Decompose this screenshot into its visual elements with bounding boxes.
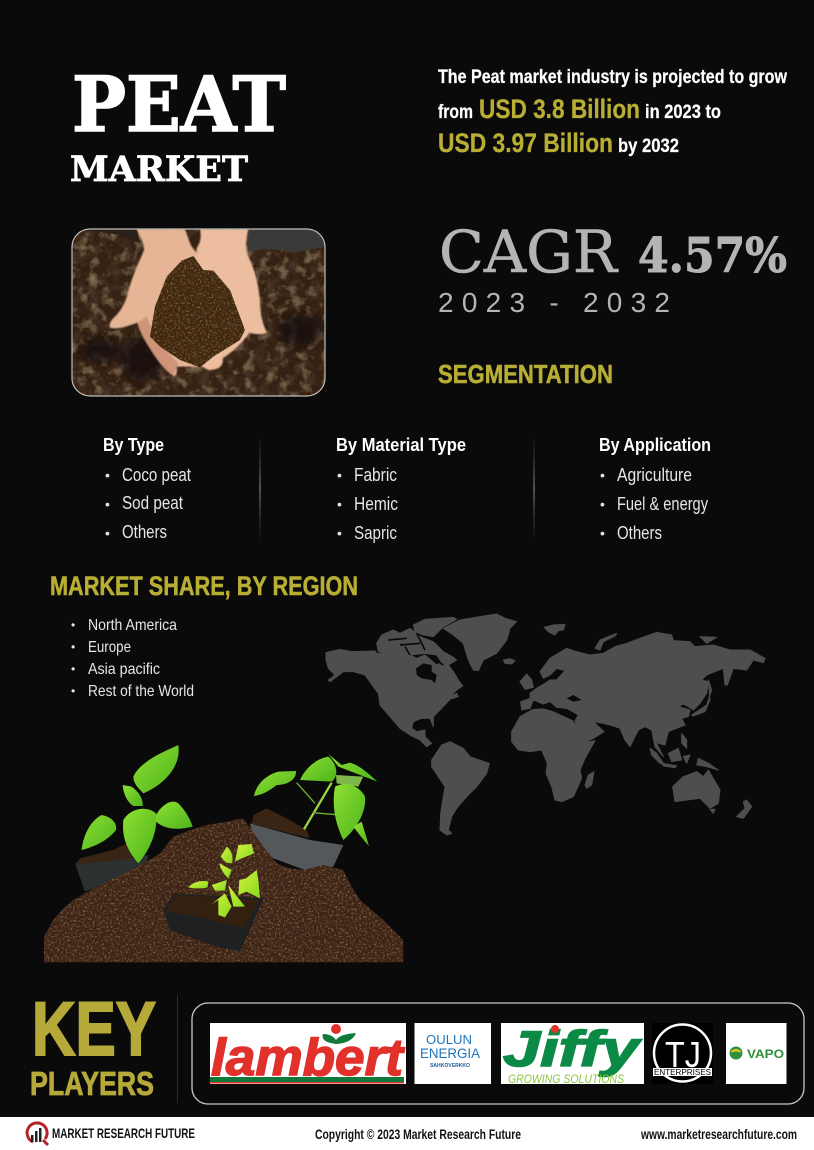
panel: key player logos: [192, 1003, 804, 1104]
middle pot soil: [167, 895, 260, 928]
logo: lambert: lambert: [211, 1029, 406, 1087]
logo: tj enterprises: TJ: [665, 1034, 701, 1075]
heading: key players: KEY: [32, 987, 156, 1072]
segmentation: by application: •: [600, 496, 605, 512]
region list: Rest of the World: [88, 683, 194, 700]
region list: Asia pacific: [88, 661, 160, 678]
segmentation: by material type: Sapric: [354, 523, 397, 543]
middle pot: [163, 893, 263, 952]
segmentation: by material type: [336, 435, 466, 543]
CAGR callout: 2023 - 2032: [438, 287, 670, 318]
logo: jiffy: [501, 1021, 644, 1086]
segmentation: by material type: Fabric: [354, 465, 397, 485]
footer bar: MARKET RESEARCH FUTURE: [52, 1125, 195, 1141]
footer bar: Copyright © 2023 Market Research Future: [315, 1127, 521, 1142]
region list: •: [71, 684, 75, 698]
title: PEAT: [72, 60, 286, 149]
logo: oulun energia: SAHKOVERKKO: [430, 1063, 470, 1069]
segmentation: by type: •: [105, 525, 110, 541]
CAGR callout: [438, 218, 787, 318]
region list: •: [71, 618, 75, 632]
market projection text: from: [438, 102, 473, 123]
peat mound: [43, 817, 404, 963]
left pot: [75, 855, 148, 892]
logo: vapo: [726, 1023, 786, 1084]
region list: •: [71, 662, 75, 676]
market projection text: in 2023 to: [645, 102, 721, 123]
heading: market share by region: MARKET SHARE, BY REGION: [50, 571, 358, 601]
heading: key players: [30, 987, 156, 1102]
logo: jiffy: GROWING SOLUTIONS: [508, 1072, 624, 1086]
left pot soil: [75, 842, 150, 865]
left seedling: [82, 745, 193, 863]
logo: oulun energia: OULUN: [426, 1032, 472, 1047]
logo: jiffy: Jiffy: [503, 1021, 642, 1077]
segmentation: by type: [103, 435, 191, 542]
title: MARKET: [70, 149, 248, 190]
segmentation: by type: Others: [122, 522, 167, 542]
region list: [71, 617, 194, 700]
right pot soil: [252, 808, 310, 838]
market projection text: USD 3.8 Billion: [479, 94, 640, 124]
segmentation: by application: By Application: [599, 435, 711, 455]
heading: segmentation: SEGMENTATION: [438, 359, 613, 389]
segmentation: by type: By Type: [103, 435, 164, 455]
market projection text: USD 3.97 Billion: [438, 128, 613, 158]
region list: •: [71, 640, 75, 654]
logo: vapo: VAPO: [747, 1047, 784, 1061]
region list: Europe: [88, 639, 131, 656]
world map: [326, 614, 765, 835]
segmentation: by material type: Hemic: [354, 494, 398, 514]
photo: seedlings in pots on peat mound: [43, 745, 404, 963]
CAGR callout: 4.57%: [638, 228, 787, 284]
segmentation: by application: Others: [617, 523, 662, 543]
right pot: [250, 823, 343, 871]
icon: market research future logo: [27, 1123, 48, 1145]
segmentation: by application: •: [600, 467, 605, 483]
photo: hands holding peat soil: [72, 229, 325, 396]
logo: tj enterprises: [652, 1023, 713, 1084]
segmentation: by material type: By Material Type: [336, 435, 466, 455]
segmentation: by material type: •: [337, 496, 342, 512]
heading: key players: PLAYERS: [30, 1065, 154, 1102]
market projection text: [438, 67, 787, 158]
footer bar: [0, 1117, 814, 1150]
segmentation: by type: Coco peat: [122, 465, 191, 485]
region list: North America: [88, 617, 177, 634]
segmentation: by type: •: [105, 467, 110, 483]
logo: oulun energia: [414, 1023, 491, 1084]
title: [70, 60, 286, 190]
segmentation: by application: Fuel & energy: [617, 494, 708, 514]
market projection text: by 2032: [618, 136, 679, 157]
segmentation: by application: [599, 435, 711, 543]
CAGR callout: CAGR: [439, 218, 619, 286]
right seedling: [254, 754, 377, 846]
middle seedling: [188, 844, 260, 917]
segmentation: by application: Agriculture: [617, 465, 692, 485]
segmentation: by type: Sod peat: [122, 493, 183, 513]
logo: oulun energia: ENERGIA: [420, 1045, 481, 1061]
segmentation: by material type: •: [337, 467, 342, 483]
segmentation: by material type: •: [337, 525, 342, 541]
segmentation: by application: •: [600, 525, 605, 541]
segmentation: by type: •: [105, 496, 110, 512]
logo: tj enterprises: ENTERPRISES: [654, 1068, 711, 1077]
